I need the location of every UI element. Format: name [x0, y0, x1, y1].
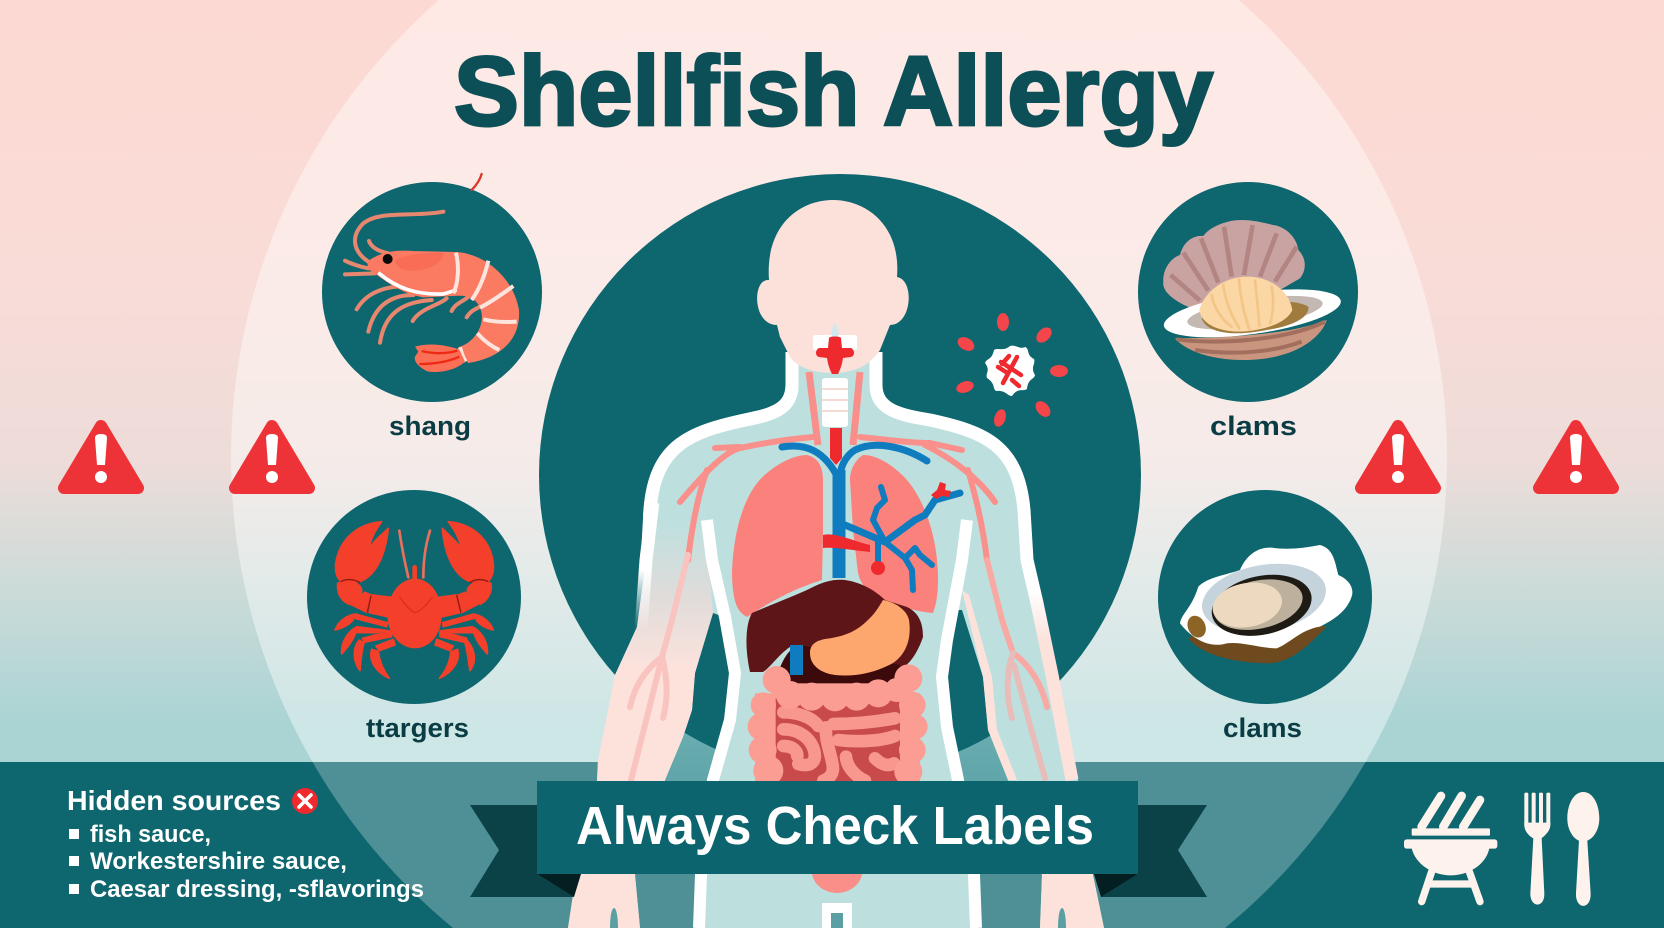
bile duct: [790, 645, 803, 675]
lungs: [732, 455, 938, 617]
ribbon text: Always Check Labels: [576, 796, 1094, 856]
source: fish sauce: fish sauce,: [90, 821, 211, 848]
neck arteries: [809, 372, 860, 445]
liver: [746, 580, 923, 680]
warning icon inner right: [1361, 426, 1435, 488]
blood vessels: [782, 445, 960, 590]
left body outline: [641, 352, 792, 630]
large pale circle: [231, 0, 1447, 762]
small intestine: [775, 697, 902, 782]
lower body details: [610, 874, 1066, 928]
left arm fill: [568, 510, 713, 928]
dark under stomach: [778, 645, 905, 690]
large intestine: [748, 664, 928, 786]
crab circle: [307, 490, 521, 704]
ribbon folds: [537, 874, 1138, 897]
oyster panel: [1158, 490, 1372, 743]
right arm inner pink edge: [962, 590, 1017, 780]
crab icon: [335, 522, 493, 678]
oyster circle: [1158, 490, 1372, 704]
body silhouette: [568, 350, 1104, 928]
title: Shellfish Allergy: [454, 36, 1213, 146]
icon: fork: [1524, 793, 1550, 905]
clam circle: [1138, 182, 1358, 402]
icon: grill: [1404, 796, 1497, 902]
bottom band: [0, 762, 1664, 928]
throat swelling: [813, 323, 857, 374]
clam panel: [1138, 182, 1358, 441]
human body figure: [568, 200, 1104, 928]
central teal circle: [539, 174, 1141, 776]
appendix blob: [812, 874, 862, 893]
warning icon inner left: [235, 426, 309, 488]
hidden sources list: [67, 785, 424, 903]
shrimp panel: [322, 174, 542, 441]
allergen burst icon: [955, 313, 1068, 428]
pelvis marker: [822, 903, 852, 928]
ribbon body: [537, 781, 1138, 874]
oyster label: clams: [1223, 713, 1302, 743]
oyster icon: [1180, 545, 1352, 663]
shrimp icon: [345, 174, 518, 372]
right body outline: [876, 352, 1072, 780]
trachea: [822, 378, 848, 465]
ribbon banner: [470, 781, 1207, 897]
right hand fill: [1008, 780, 1104, 928]
clam label: clams: [1210, 411, 1297, 441]
ribbon tails: [470, 805, 1207, 897]
torso white lines: [699, 520, 735, 928]
scallop clam icon: [1161, 220, 1344, 360]
warning icon far right: [1539, 426, 1613, 488]
hidden sources heading: Hidden sources: [67, 785, 281, 816]
crab label: ttargers: [366, 713, 469, 743]
crab panel: [307, 490, 521, 743]
shade under central circle: [655, 690, 1025, 781]
pulmonary red vessels and clots: [823, 482, 951, 575]
hand finger slits: [610, 908, 618, 928]
icon: spoon: [1567, 792, 1599, 906]
red x icon: [292, 788, 318, 814]
shrimp label: shang: [389, 411, 471, 441]
shrimp circle: [322, 182, 542, 402]
head: [757, 200, 909, 373]
stomach: [810, 600, 910, 676]
source: caesar dressing: Caesar dressing, -sflavorings: [90, 876, 424, 903]
source: worcestershire sauce: Workestershire sauce,: [90, 848, 347, 875]
warning icon far left: [64, 426, 138, 488]
arm vessels: [630, 437, 1047, 780]
